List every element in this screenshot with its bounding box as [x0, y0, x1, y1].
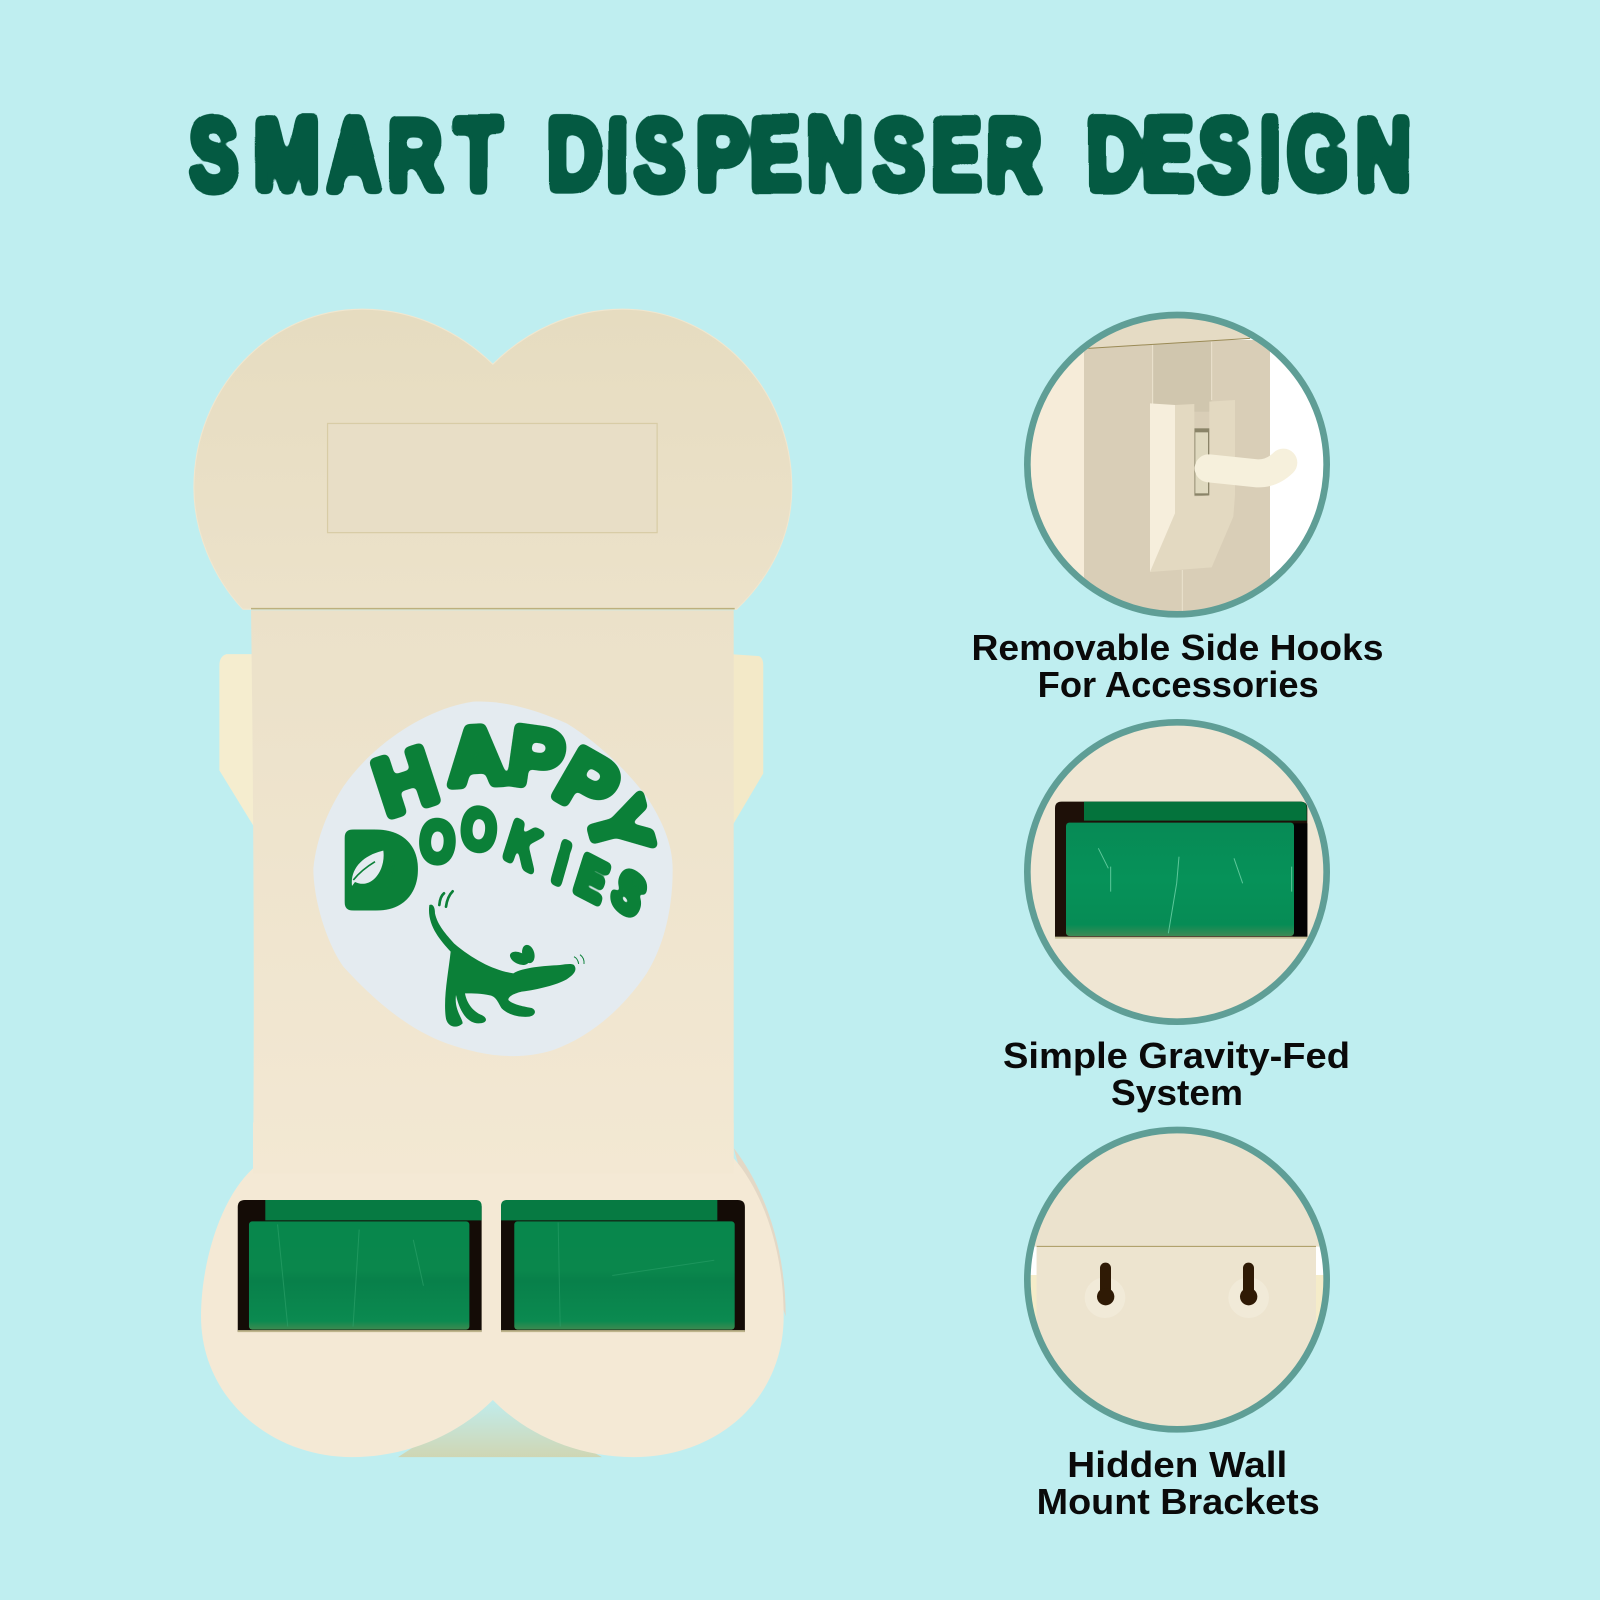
nose wag marks: [574, 955, 584, 964]
logo word HAPPY: HAPPY: [363, 709, 670, 865]
caption: wall mount: [1037, 1444, 1320, 1522]
bottom lobes: [201, 1122, 784, 1457]
seam: [251, 608, 735, 610]
creases: [1098, 848, 1292, 933]
caption: wall mount: Mount Brackets: [1037, 1481, 1320, 1522]
hook peg: [1209, 463, 1283, 473]
keyhole right: [1228, 1263, 1269, 1318]
roll creases: [558, 1222, 714, 1327]
roll creases: [278, 1224, 423, 1327]
right green roll: [514, 1221, 735, 1330]
caption: gravity-fed: System: [1111, 1072, 1243, 1113]
label recess: [328, 423, 657, 533]
main body: [251, 610, 734, 1173]
feature circle: wall mount brackets: [1027, 1127, 1327, 1433]
side clip right: [731, 654, 763, 829]
icon: dog: [429, 891, 584, 1027]
keyhole left: [1085, 1263, 1125, 1318]
hook slot: [1194, 428, 1210, 496]
dog body: [429, 905, 575, 1027]
tail wag marks: [439, 891, 453, 907]
slot sill: [501, 1330, 745, 1332]
sill: [1055, 937, 1307, 939]
caption: side hooks: Removable Side Hooks: [972, 627, 1384, 668]
product: bone-shaped bag dispenser: [194, 309, 792, 1457]
back panel photo: [1027, 1127, 1327, 1433]
sticker disc: [313, 702, 673, 1056]
logo word OOKiES: OOKiES: [418, 794, 655, 930]
caption: gravity-fed: Simple Gravity-Fed: [1003, 1035, 1350, 1076]
left green roll: [249, 1221, 469, 1330]
caption: gravity-fed: [1003, 1035, 1350, 1113]
icon: leaf: [352, 851, 384, 886]
roll photo: [1027, 720, 1327, 1023]
logo sticker: [313, 702, 673, 1056]
panel: [1036, 1247, 1037, 1275]
feature circle: gravity fed roll: [1027, 720, 1327, 1023]
floor shadow: [398, 1396, 602, 1457]
dark slot: [1055, 802, 1307, 937]
caption: wall mount: Hidden Wall: [1067, 1444, 1287, 1485]
top cap: [1090, 318, 1251, 348]
hook bracket side: [1150, 400, 1235, 572]
left bag slot: [238, 1200, 482, 1332]
logo D backing: [355, 843, 395, 897]
logo letter D: D: [344, 814, 416, 926]
top lobes: [194, 309, 792, 609]
right bag slot: [501, 1200, 745, 1332]
title: SMART DISPENSER DESIGN: [188, 98, 1411, 212]
ring: [1027, 1130, 1327, 1429]
hook photo: [1027, 313, 1327, 617]
green roll: [1066, 823, 1294, 936]
feature circle: side hook: [1027, 313, 1327, 617]
caption: side hooks: [972, 627, 1384, 705]
dog ear 2: [520, 943, 537, 965]
ring: [1027, 722, 1327, 1022]
wall panel: [1084, 340, 1270, 617]
ring: [1027, 315, 1327, 614]
right black band: [1293, 823, 1307, 937]
hook bracket front: [1150, 403, 1175, 572]
right bag strip: [501, 1200, 717, 1220]
bag strip: [1084, 802, 1307, 821]
left bag strip: [265, 1200, 482, 1220]
dog ear 1: [508, 949, 531, 968]
caption: side hooks: For Accessories: [1038, 664, 1319, 705]
lower right shadow edge: [734, 1148, 786, 1316]
side clip left: [219, 654, 255, 829]
slot sill: [238, 1330, 482, 1332]
